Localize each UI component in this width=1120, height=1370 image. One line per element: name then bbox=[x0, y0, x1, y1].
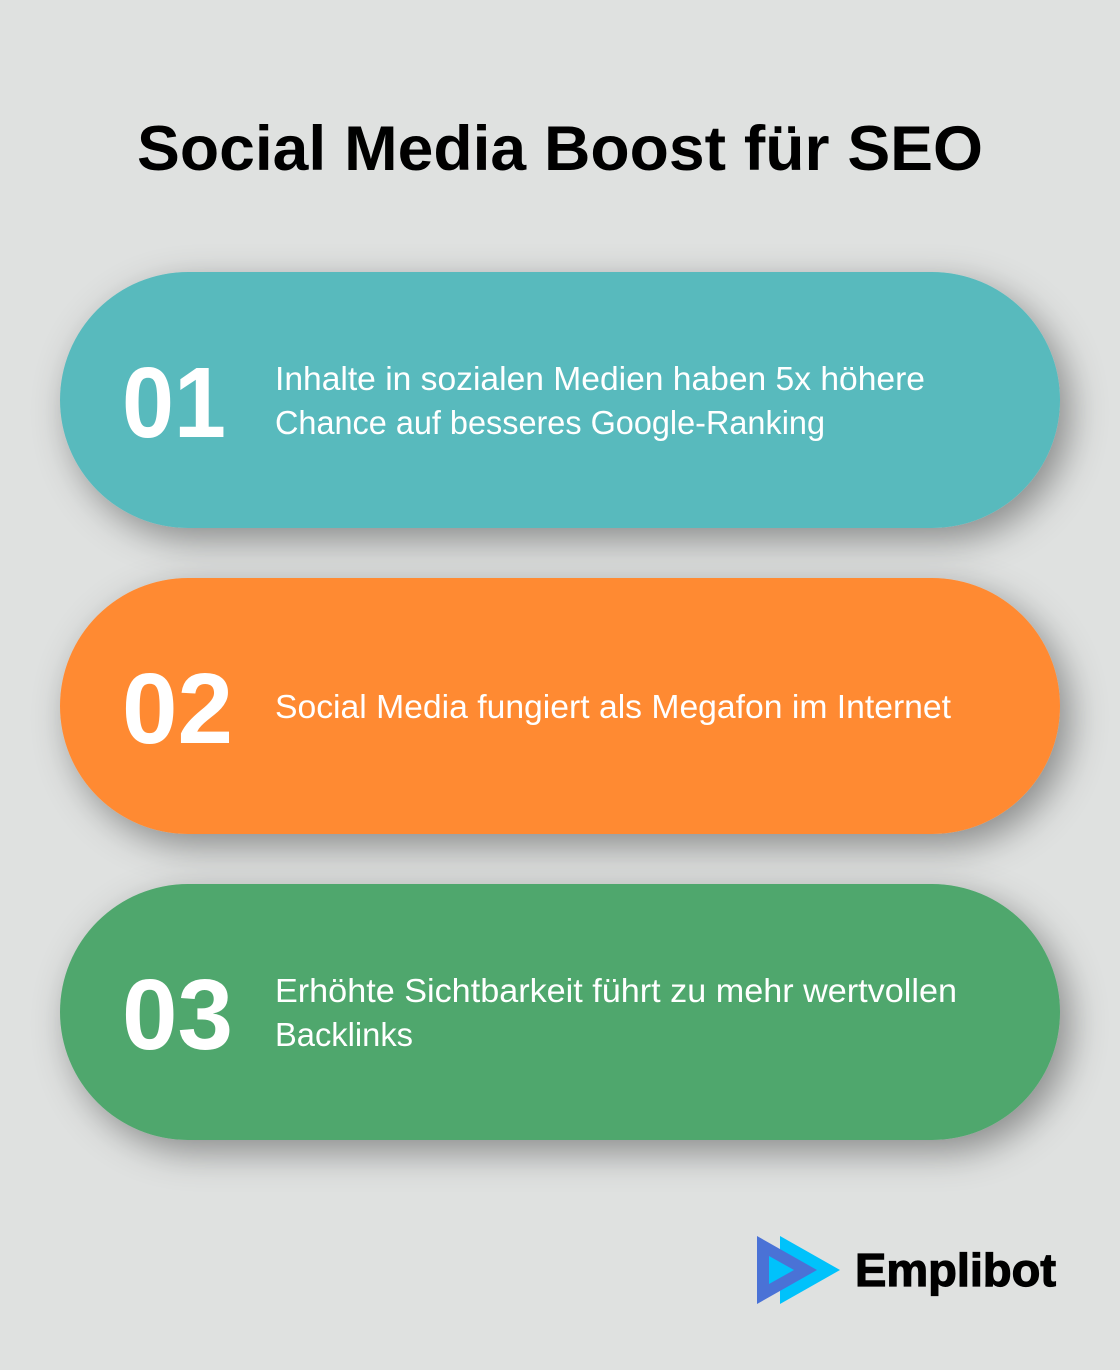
panel: step 02 bbox=[60, 578, 1060, 834]
text block 02: Social Media fungiert als Megafon im Internet bbox=[275, 688, 951, 725]
title: Social Media Boost für SEO bbox=[137, 114, 983, 184]
icon: play triangles bbox=[757, 1236, 840, 1304]
panel: step 03 bbox=[60, 884, 1060, 1140]
text block 01: Chance auf besseres Google-Ranking bbox=[275, 404, 825, 441]
number 01: 01 bbox=[122, 347, 226, 459]
pill background 03 bbox=[60, 884, 1060, 1140]
panel: step 01 bbox=[60, 272, 1060, 528]
text block 03 bbox=[275, 972, 957, 1053]
pill background 02 bbox=[60, 578, 1060, 834]
text block 03: Backlinks bbox=[275, 1016, 413, 1053]
wordmark: Emplibot bbox=[855, 1244, 1056, 1296]
pill background 01 bbox=[60, 272, 1060, 528]
text block 01 bbox=[275, 360, 925, 441]
number 02: 02 bbox=[122, 653, 233, 765]
logo: Emplibot bbox=[757, 1236, 1056, 1304]
text block 01: Inhalte in sozialen Medien haben 5x höhere bbox=[275, 360, 925, 397]
number 03: 03 bbox=[122, 959, 233, 1071]
text block 03: Erhöhte Sichtbarkeit führt zu mehr wertvollen bbox=[275, 972, 957, 1009]
